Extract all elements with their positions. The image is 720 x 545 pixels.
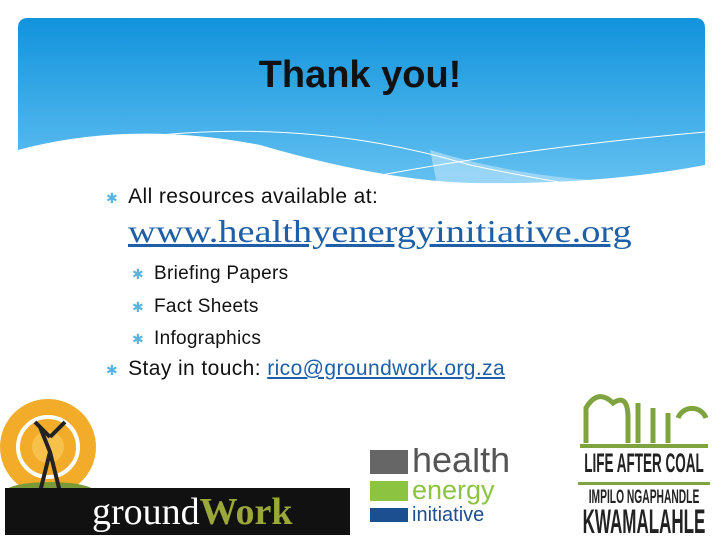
url: www.healthyenergyinitiative.org (128, 213, 632, 249)
logo: healthy energy initiative: initiative (412, 504, 484, 526)
title: Thank you! (259, 54, 461, 96)
logo: life after coal: IMPILO NGAPHANDLE (589, 487, 699, 508)
logo: groundWork (0, 399, 350, 535)
sub bullets: ✱ Briefing Papers (132, 263, 288, 284)
sub bullets: ✱ Infographics (132, 328, 261, 349)
bullet: contact: ✱ Stay in touch: rico@groundwork.org.za (106, 357, 505, 380)
logo: groundWork: groundWork (92, 491, 293, 533)
logo: healthy energy initiative: energy (412, 475, 495, 505)
sub bullets (132, 263, 288, 349)
sub bullets: ✱ Fact Sheets (132, 296, 259, 316)
logo: life after coal (578, 394, 710, 538)
logo: life after coal: LIFE AFTER COAL (584, 448, 704, 478)
logo: healthy energy initiative (370, 448, 510, 526)
header banner (18, 18, 705, 184)
bullet: resources: ✱ All resources available at: (106, 185, 378, 208)
